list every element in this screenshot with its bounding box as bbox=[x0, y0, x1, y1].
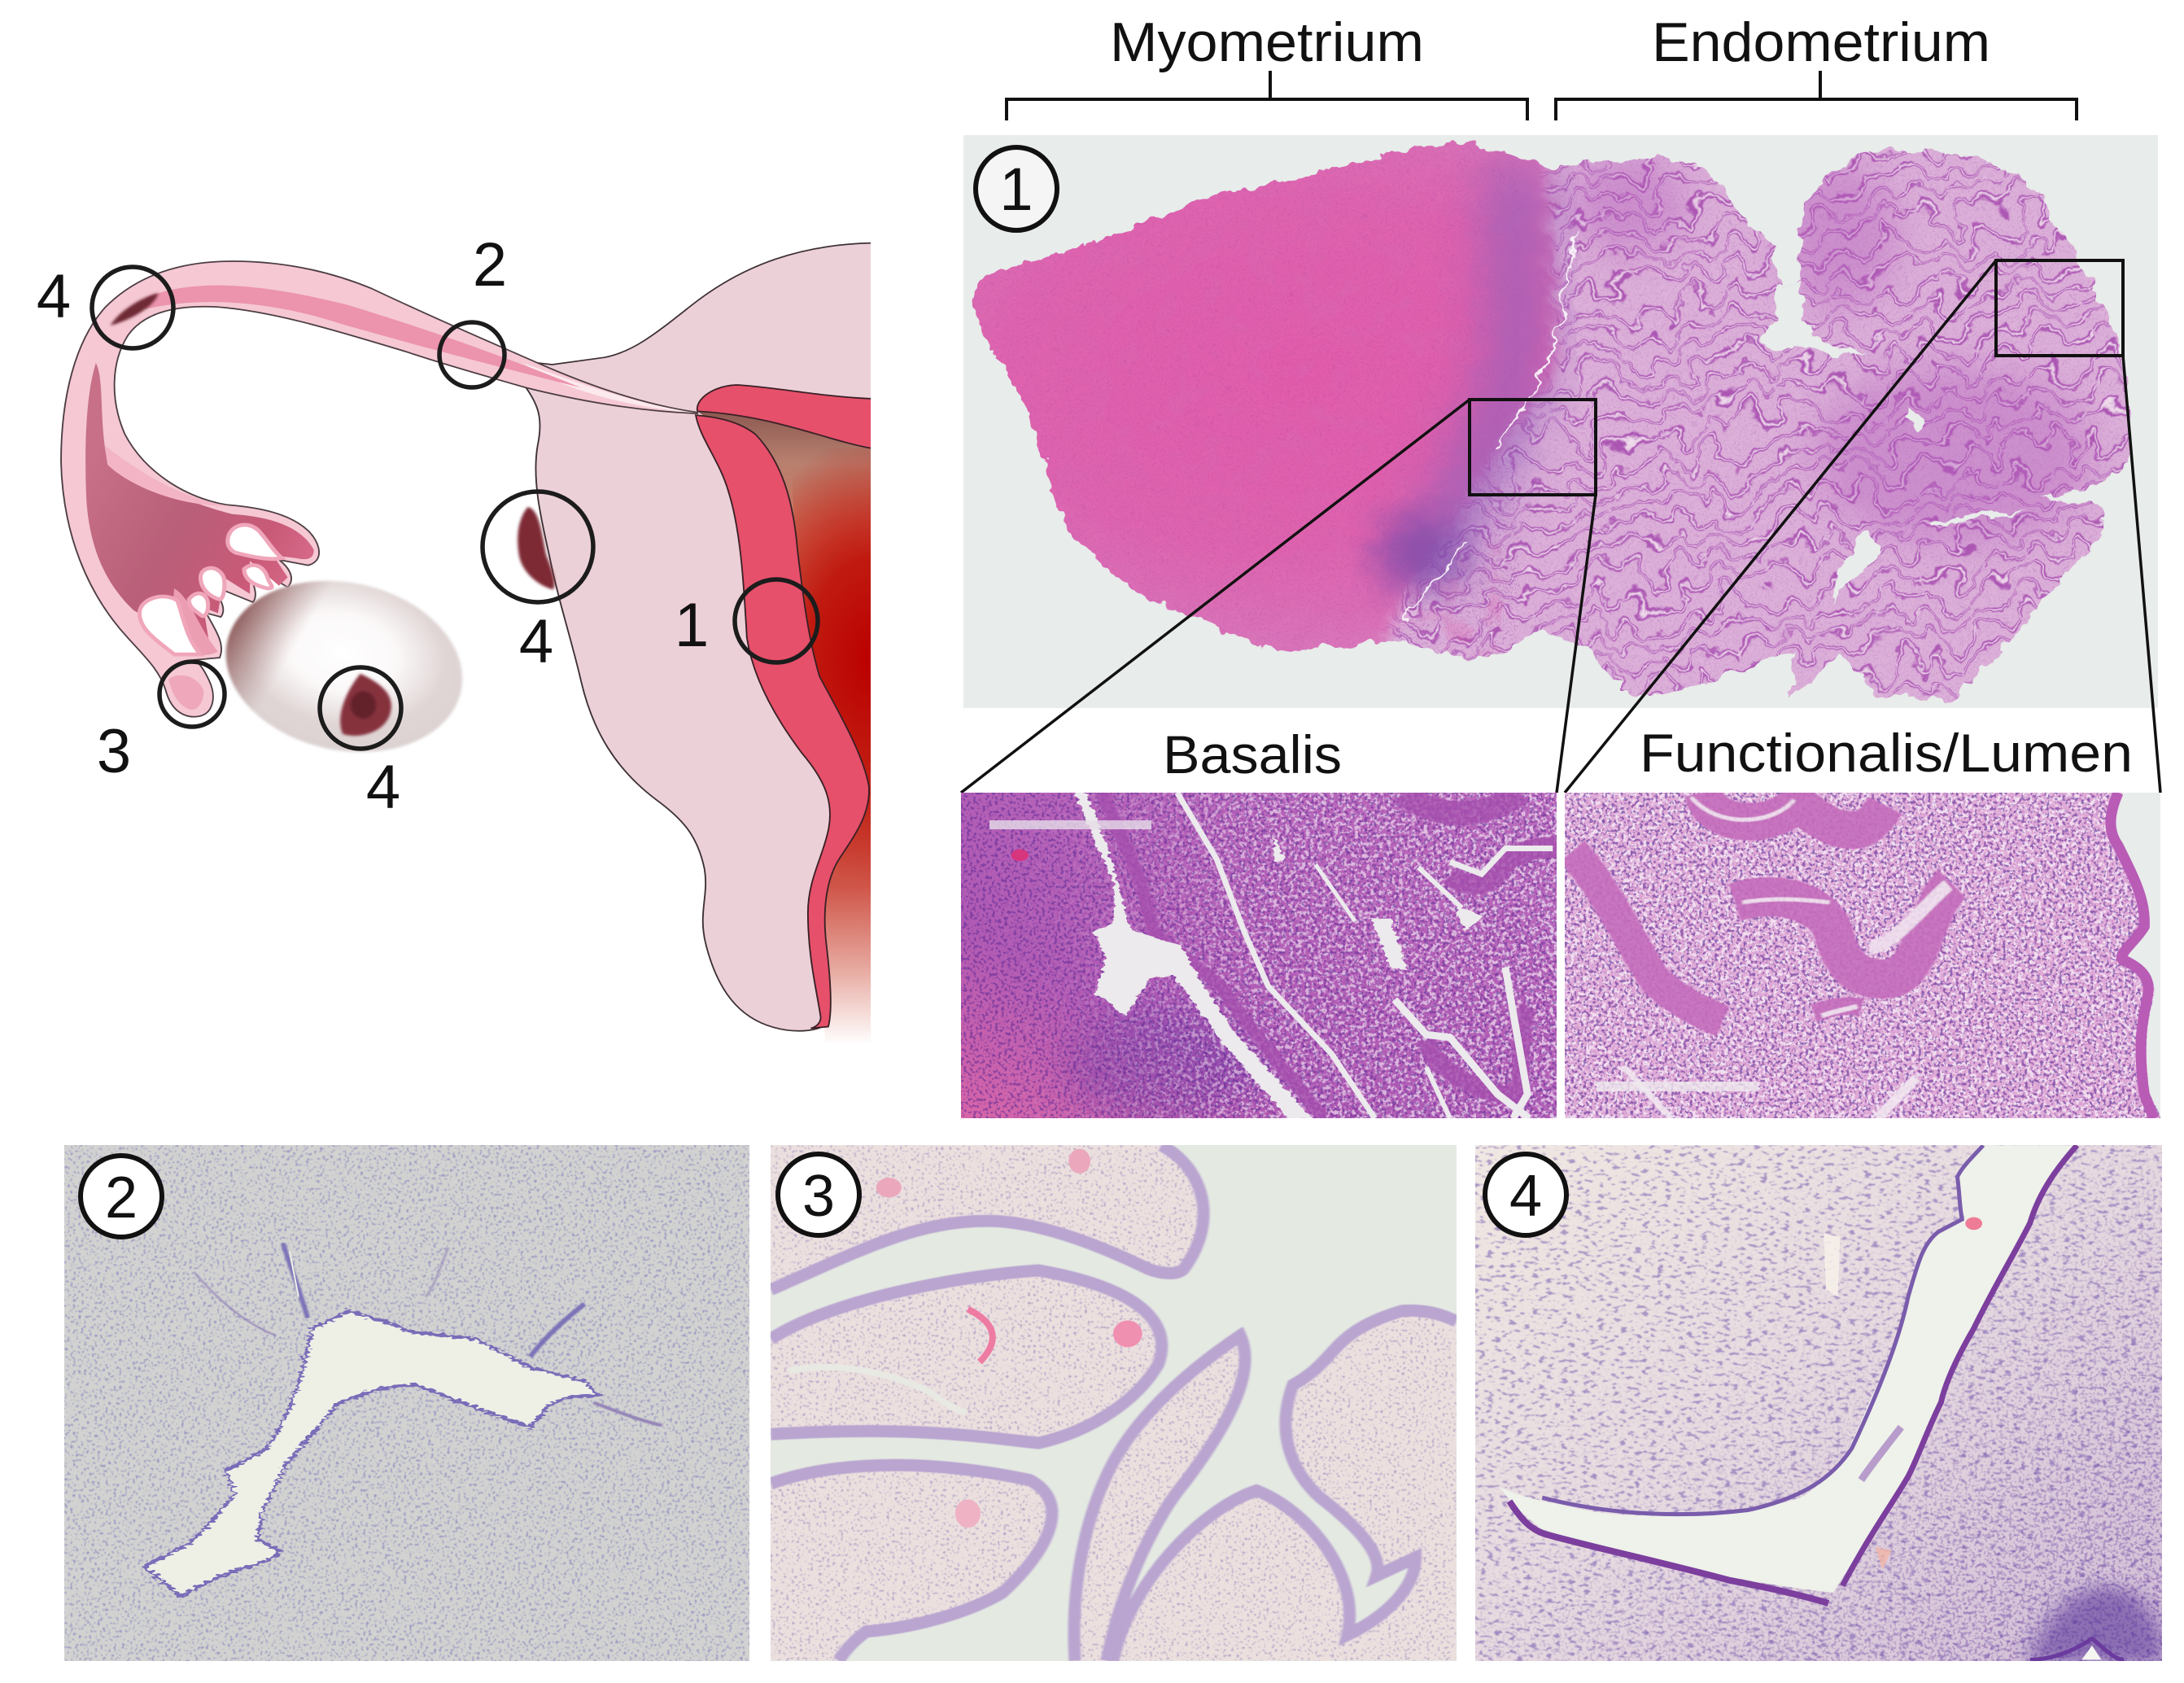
endometrium gaps bbox=[1765, 280, 2027, 602]
darker gland lobes bbox=[1570, 155, 2091, 545]
badge 4 bbox=[1485, 1154, 1566, 1235]
badge 3: 3 bbox=[802, 1164, 835, 1229]
heading: Functionalis/Lumen: Functionalis/Lumen bbox=[1640, 723, 2133, 783]
glands and lumens bbox=[1011, 793, 1561, 1118]
lumen bbox=[144, 1244, 662, 1596]
panel: functionalis micrograph bbox=[1565, 793, 2177, 1118]
zoom lines bbox=[961, 260, 2160, 793]
region box: basalis bbox=[1470, 400, 1596, 495]
glands bbox=[1573, 793, 1952, 1118]
purple junction patch bbox=[1375, 517, 1465, 590]
fine white clefts bbox=[1403, 229, 1576, 621]
location numbers bbox=[37, 230, 709, 822]
bracket: endometrium bbox=[1556, 71, 2077, 120]
location numbers: 1 bbox=[675, 591, 709, 660]
location circles bbox=[92, 267, 818, 749]
badge 2: 2 bbox=[105, 1165, 138, 1231]
panel 3: fimbriae micrograph bbox=[771, 1145, 1457, 1661]
location numbers: 4 bbox=[37, 262, 71, 331]
endometrium band bbox=[696, 385, 871, 1029]
badge 3 bbox=[778, 1154, 859, 1235]
scale bar bbox=[1597, 1082, 1758, 1091]
panel 4: endometriotic lesion micrograph bbox=[1475, 1145, 2166, 1663]
region box: functionalis bbox=[1996, 260, 2123, 356]
panel: basalis micrograph bbox=[961, 793, 1561, 1123]
location numbers: 2 bbox=[473, 230, 507, 299]
dark stroma patch bbox=[1066, 1009, 1261, 1123]
badge 1 bbox=[976, 147, 1057, 230]
tissue section bbox=[972, 140, 2132, 703]
luminal surface edge bbox=[2111, 793, 2177, 1118]
dense stroma and lumen bbox=[1500, 1145, 2166, 1663]
location numbers: 4 bbox=[366, 753, 400, 822]
myometrium region bbox=[972, 140, 1568, 652]
heading: Endometrium: Endometrium bbox=[1652, 11, 1990, 73]
uterine cavity bbox=[697, 411, 871, 1047]
purple junction zone bbox=[1424, 163, 1519, 570]
panel 1: whole section micrograph bbox=[963, 135, 2158, 708]
fallopian tube and fimbriae bbox=[61, 261, 697, 717]
endometriotic lesions bbox=[111, 293, 554, 736]
ovary bbox=[207, 558, 482, 775]
badge 2 bbox=[81, 1156, 162, 1237]
uterus wall bbox=[526, 243, 871, 1031]
panel 2: tube isthmus micrograph bbox=[64, 1145, 749, 1661]
heading: Myometrium: Myometrium bbox=[1110, 11, 1424, 73]
scale bar bbox=[989, 820, 1151, 829]
myometrium texture bbox=[963, 135, 1468, 708]
bracket: myometrium bbox=[1007, 71, 1527, 120]
fimbrial gaps bbox=[139, 525, 282, 654]
heading: Basalis: Basalis bbox=[1163, 724, 1342, 785]
location numbers: 3 bbox=[97, 717, 131, 786]
blood vessels bbox=[876, 1149, 1142, 1528]
fimbrial folds bbox=[771, 1145, 1457, 1661]
badge 1: 1 bbox=[999, 155, 1033, 223]
anatomical diagram: uterus, fallopian tube and ovary bbox=[37, 230, 871, 1047]
badge 4: 4 bbox=[1509, 1164, 1542, 1229]
location numbers: 4 bbox=[519, 607, 553, 676]
